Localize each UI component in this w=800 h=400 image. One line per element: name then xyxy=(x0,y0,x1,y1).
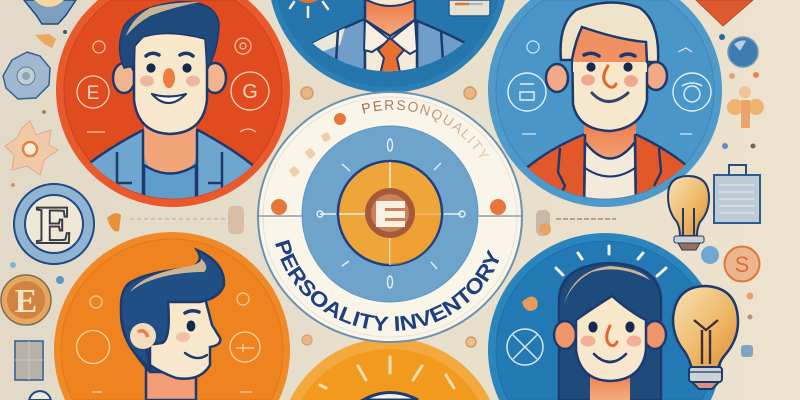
icon: left badge xyxy=(508,73,546,111)
portrait: man with cream hair on blue circle xyxy=(488,0,722,215)
light rays xyxy=(556,246,666,276)
face details xyxy=(138,311,207,358)
portrait: man in profile on orange circle xyxy=(54,232,290,400)
icon: badge card xyxy=(449,0,490,16)
heading: faded arc text: PERSONQUALITY xyxy=(362,100,490,158)
icon: peach flower xyxy=(5,121,58,175)
small right dots xyxy=(722,72,759,357)
icon: orange E coin: E xyxy=(15,283,37,320)
icon: E coin xyxy=(14,184,94,264)
icon: left badge xyxy=(76,330,110,364)
icon: clipboard xyxy=(714,165,760,223)
heading: personality inventory: PERSOALITY INVENTORY xyxy=(275,240,500,331)
orange dial xyxy=(338,161,442,265)
icon: top blue flower xyxy=(24,0,76,24)
doodles xyxy=(90,293,252,392)
doodles xyxy=(522,41,692,134)
icon: square card xyxy=(15,341,43,380)
doodles xyxy=(87,38,256,132)
icon: right badge xyxy=(673,73,711,111)
icon: bottom coin xyxy=(29,391,51,400)
figure xyxy=(554,263,666,400)
icon: orange leaf xyxy=(522,296,538,311)
light rays xyxy=(320,357,454,388)
icon: light bulb upper xyxy=(668,176,709,250)
portrait: man on red circle xyxy=(56,0,290,215)
figure xyxy=(90,1,254,199)
icon: right badge xyxy=(230,332,260,362)
icon: small dot xyxy=(719,34,725,40)
face details xyxy=(140,53,200,103)
portrait: orange circle at bottom centre xyxy=(290,338,490,400)
disc markers xyxy=(317,139,465,288)
icon: blue sphere xyxy=(728,37,758,67)
icon: crossed badge xyxy=(507,329,543,365)
icon: G badge: G xyxy=(242,81,258,103)
icon: orange mushroom xyxy=(727,86,764,128)
faded marks xyxy=(288,132,331,177)
icon: red kite xyxy=(696,0,753,26)
icon: E badge xyxy=(77,76,109,108)
icon: E badge: E xyxy=(87,83,99,104)
panel: central personality inventory dial xyxy=(257,91,523,343)
portrait: woman on blue circle xyxy=(488,233,722,400)
icon: orange splash xyxy=(35,34,56,48)
icon: sun xyxy=(290,0,328,17)
icon: large light bulb xyxy=(673,286,738,389)
connector ornaments xyxy=(107,87,616,347)
figure xyxy=(121,250,224,400)
icon: blue blob xyxy=(701,246,719,264)
blue disc xyxy=(302,126,478,302)
small dots xyxy=(10,30,67,284)
hair top xyxy=(363,392,418,400)
figure xyxy=(526,1,686,199)
icon: G badge xyxy=(231,72,269,110)
portrait: man in suit and tie on blue circle xyxy=(271,0,505,100)
icon: orange E coin xyxy=(1,275,51,325)
icon: blue gear xyxy=(3,52,50,99)
face details xyxy=(580,322,642,362)
icon: S coin xyxy=(724,246,760,282)
pin markers xyxy=(271,113,506,215)
centre E xyxy=(365,188,415,238)
icon: E coin: E xyxy=(36,195,72,255)
icon: S coin: S xyxy=(735,252,749,277)
face details xyxy=(581,53,638,102)
